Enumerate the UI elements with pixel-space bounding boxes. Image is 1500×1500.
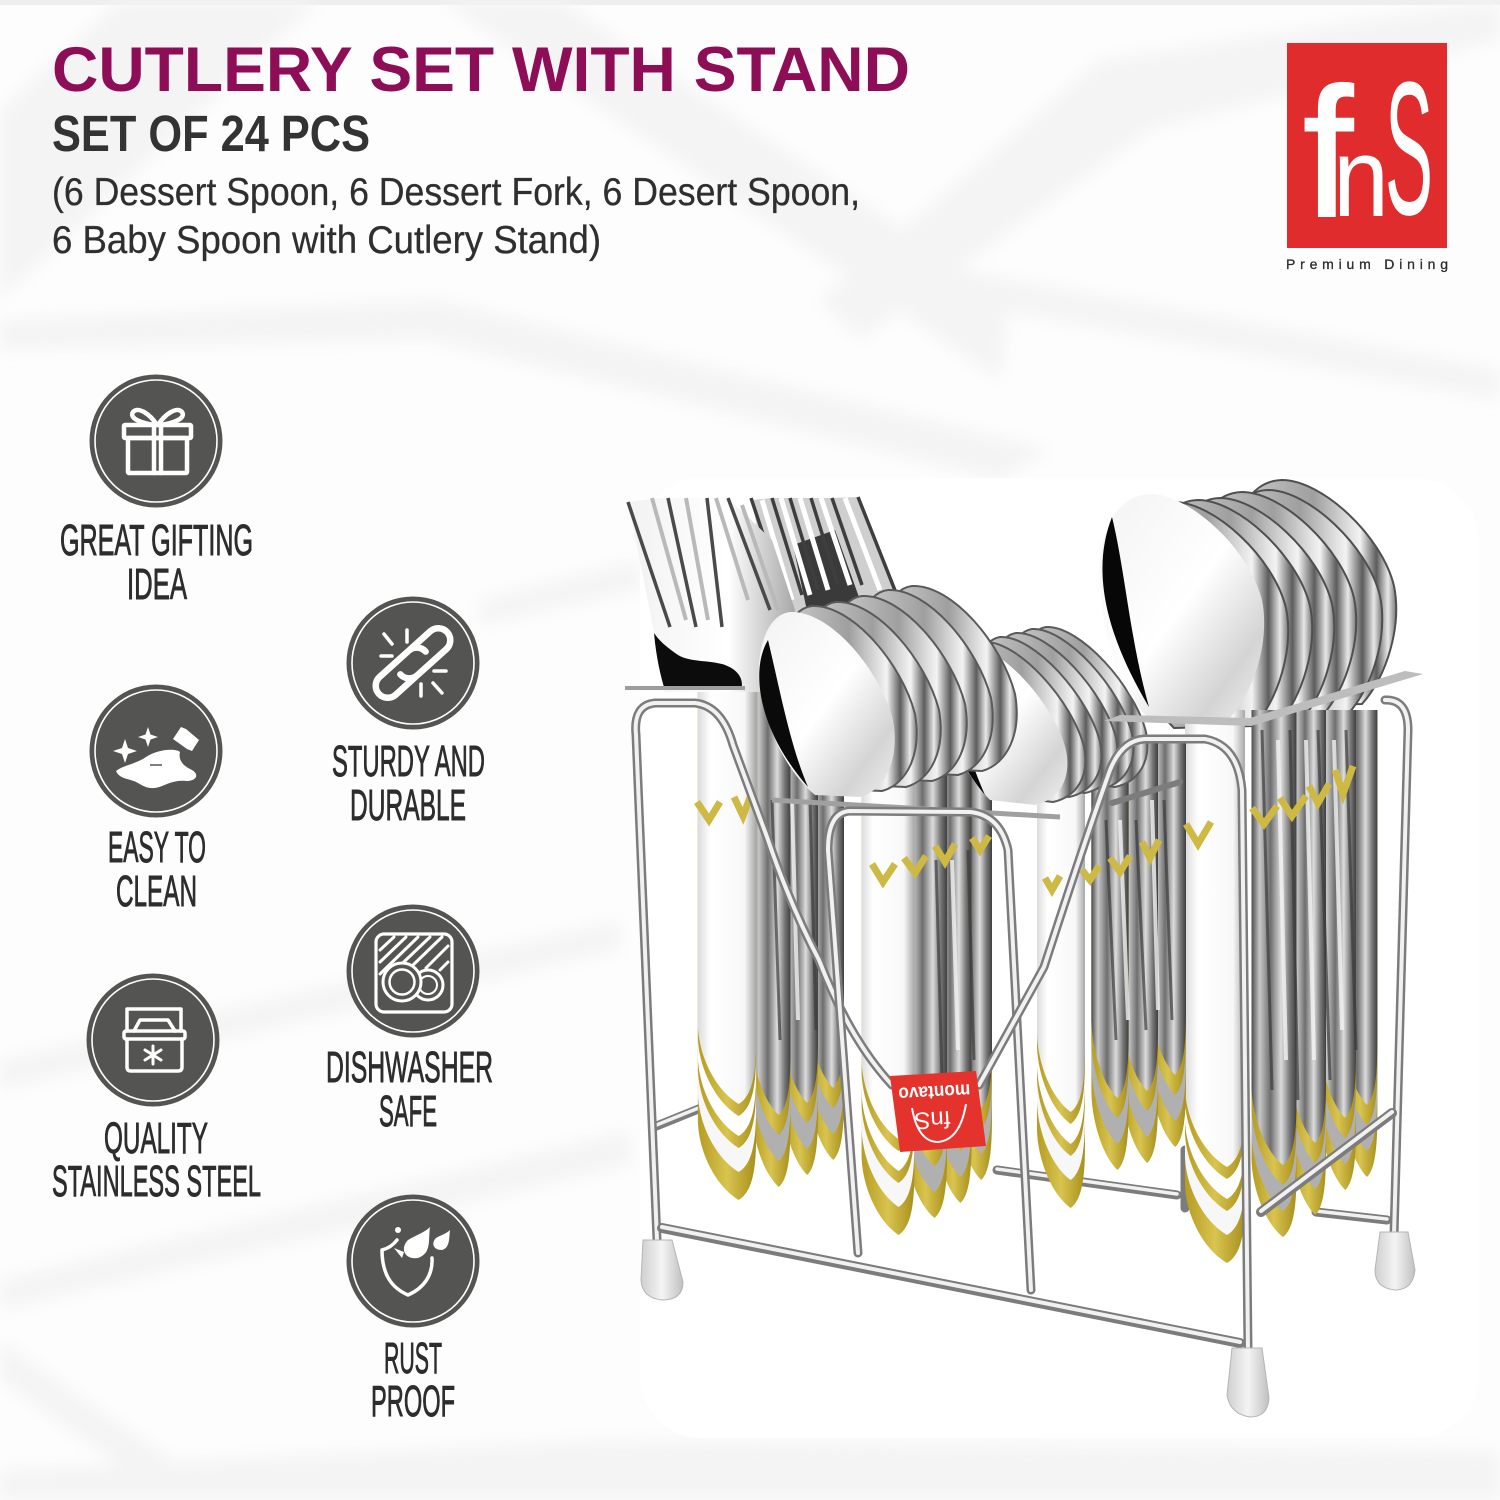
logo: n [1333,115,1389,240]
label [332,737,485,830]
label: GREAT GIFTING [60,516,253,565]
medium spoons, rear stack [781,586,1017,791]
handles: fork group [698,692,844,1200]
label [108,823,206,916]
handles: right group [1185,710,1378,1263]
label [371,1334,455,1426]
product: cutlery in stand [625,480,1423,1417]
description: (6 Dessert Spoon, 6 Dessert Fork, 6 Desert Spoon, [52,171,860,214]
inner diagonal bar [1112,782,1180,803]
icon: cooler box [86,974,220,1106]
medium spoon, front [759,612,895,797]
label [60,516,253,609]
back rails [654,1107,1387,1220]
small spoon, front [940,645,1067,805]
big spoons, rear stack [1124,480,1396,728]
mid plate [772,800,1060,817]
stand feet [641,1232,1415,1417]
label [326,1043,493,1136]
feature: sturdy and durable [332,596,485,830]
label: PROOF [371,1377,455,1426]
icon: gift [90,374,222,508]
big spoon, front [1100,494,1264,720]
label [52,1114,261,1206]
bottom front rail [662,1227,1240,1343]
small spoons, rear stack [958,627,1147,802]
red tag [890,1071,986,1152]
feature: easy to clean [90,684,222,916]
logo [1287,43,1447,255]
feature: great gifting idea [60,374,253,609]
label: STURDY AND [332,737,485,786]
feature: dishwasher safe [326,904,493,1136]
front wire: middle frame [828,811,1031,1290]
product backdrop panel [640,478,1478,1438]
icon: chain link [346,596,480,730]
icon: spill with sparkles [90,684,222,818]
icon: dishwasher plates [346,904,480,1038]
label: DURABLE [350,781,466,830]
gold chevrons [697,766,1353,890]
label: STAINLESS STEEL [52,1157,261,1206]
feature: quality stainless steel [52,974,261,1206]
label: QUALITY [104,1114,208,1163]
feature: rust proof [346,1194,480,1426]
label: CLEAN [116,867,197,916]
label: EASY TO [108,823,206,872]
handles: first middle group [862,772,992,1235]
description: 6 Baby Spoon with Cutlery Stand) [52,219,601,262]
label: RUST [384,1334,442,1383]
description [52,171,860,262]
logo: f [1303,49,1354,255]
red tag: fnS [914,1105,951,1134]
right back post [1385,700,1408,1235]
title: CUTLERY SET WITH STAND [52,35,910,105]
label: DISHWASHER [326,1043,493,1092]
right plate [1104,671,1423,726]
label: SAFE [379,1087,437,1136]
handle reflections [772,730,1356,1100]
right diagonal rail [1261,1112,1392,1212]
front fork [625,498,795,692]
icon: shield with water drops [346,1194,480,1328]
subtitle: SET OF 24 PCS [52,105,370,162]
handles: second middle group [1037,744,1186,1208]
red tag: montavo [898,1079,971,1104]
logo tagline: Premium Dining [1286,256,1448,272]
back forks [751,497,898,690]
front wire: right frame [979,739,1248,1350]
label: IDEA [127,560,187,609]
front wire: left frame [636,703,892,1240]
